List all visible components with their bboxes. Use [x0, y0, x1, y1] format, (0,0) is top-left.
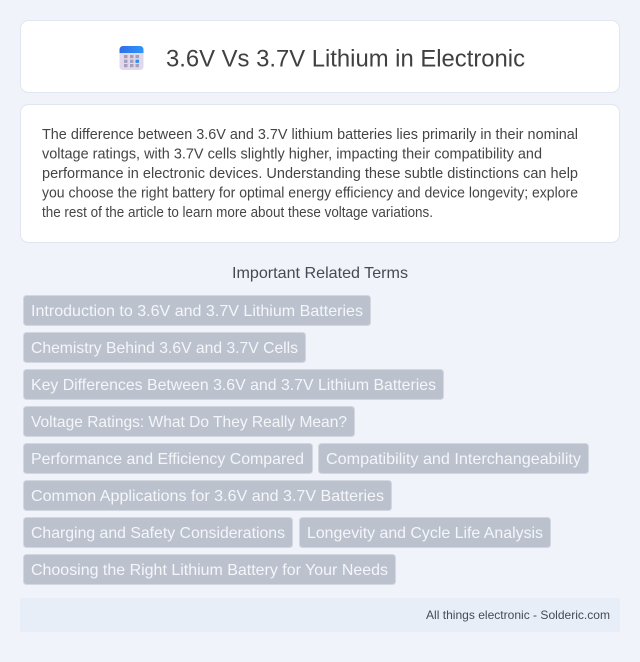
text block: intro: performance in electronic devices. Understanding these subtle distinctions can help	[42, 166, 578, 182]
tag: key differences	[24, 370, 444, 400]
tag: key differences: Key Differences Between 3.6V and 3.7V Lithium Batteries	[31, 377, 436, 394]
tag: compatibility	[318, 444, 588, 474]
tag: longevity	[300, 518, 550, 548]
tag: applications: Common Applications for 3.6V and 3.7V Batteries	[31, 488, 384, 505]
panel: intro paragraph	[20, 104, 620, 242]
tag: choosing: Choosing the Right Lithium Battery for Your Needs	[31, 562, 388, 579]
text block: intro: the rest of the article to learn more about these voltage variations.	[42, 205, 433, 221]
footer credit: All things electronic - Solderic.com	[426, 608, 610, 622]
footer	[20, 598, 620, 632]
tag: applications	[24, 480, 392, 510]
tag: voltage ratings	[24, 406, 354, 436]
tag: chemistry: Chemistry Behind 3.6V and 3.7V Cells	[31, 340, 298, 357]
tag: charging: Charging and Safety Considerations	[31, 525, 285, 542]
tag: voltage ratings: Voltage Ratings: What Do They Really Mean?	[31, 414, 347, 431]
tag: longevity: Longevity and Cycle Life Analysis	[307, 525, 543, 542]
tag: performance	[24, 444, 312, 474]
tag: choosing	[24, 554, 396, 584]
text block: intro	[42, 127, 578, 221]
tag: compatibility: Compatibility and Interchangeability	[326, 451, 581, 468]
title: 3.6V Vs 3.7V Lithium in Electronic	[166, 46, 525, 72]
tag: performance: Performance and Efficiency Compared	[31, 451, 304, 468]
text block: intro: The difference between 3.6V and 3.7V lithium batteries lies primarily in their nominal	[42, 127, 578, 143]
tag: charging	[24, 518, 292, 548]
icon: calendar	[120, 46, 144, 70]
text block: intro: voltage ratings, with 3.7V cells slightly higher, impacting their compatibility and	[42, 146, 542, 162]
panel: title header	[20, 20, 620, 92]
heading: related terms: Important Related Terms	[232, 265, 408, 282]
tag: introduction	[24, 296, 370, 326]
text block: intro: you choose the right battery for optimal energy efficiency and device longevity; explore	[42, 186, 578, 202]
tag: introduction: Introduction to 3.6V and 3.7V Lithium Batteries	[31, 303, 363, 320]
tag: chemistry	[24, 332, 306, 362]
